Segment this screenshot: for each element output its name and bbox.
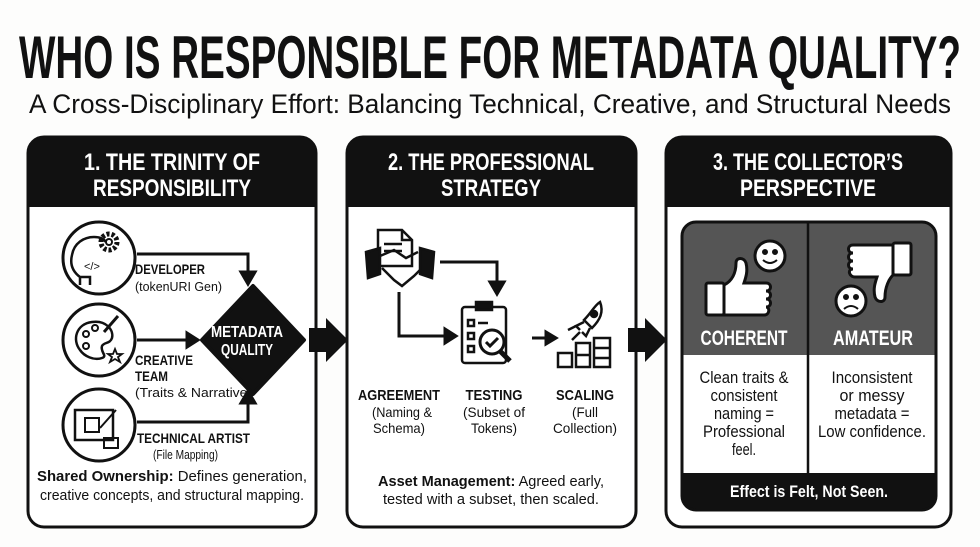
panel header 3: PERSPECTIVE bbox=[740, 175, 876, 202]
step labels bbox=[358, 387, 617, 436]
panel header 2: STRATEGY bbox=[441, 175, 541, 202]
icon: handshake with document bbox=[366, 230, 434, 286]
panel: professional strategy bbox=[347, 137, 636, 527]
panel header 2: 2. THE PROFESSIONAL bbox=[388, 149, 594, 176]
comparison box bbox=[681, 222, 937, 510]
icon: creative palette bbox=[63, 304, 135, 376]
panel header 2 bbox=[347, 137, 636, 207]
coherent description: consistent bbox=[710, 386, 778, 405]
shared ownership text: creative concepts, and structural mapping. bbox=[40, 487, 304, 504]
arrow: panel 1 to 2 bbox=[309, 318, 348, 362]
metadata quality diamond: METADATA bbox=[211, 324, 283, 341]
icon: thumbs down with frown bbox=[836, 243, 911, 316]
arrow: technical artist to quality bbox=[137, 391, 255, 422]
amateur description bbox=[818, 368, 926, 441]
technical artist label: TECHNICAL ARTIST bbox=[137, 430, 250, 446]
arrow: testing to scaling bbox=[532, 332, 556, 344]
amateur description: Inconsistent bbox=[832, 368, 913, 387]
amateur description: Low confidence. bbox=[818, 422, 926, 441]
icon: thumbs up with smile bbox=[706, 241, 785, 315]
icon: rocket scaling bbox=[558, 302, 610, 367]
amateur description: metadata = bbox=[834, 404, 910, 423]
comparison box: AMATEUR bbox=[833, 327, 913, 350]
panel header 1 bbox=[28, 137, 316, 207]
coherent description bbox=[700, 368, 789, 459]
step labels: Tokens) bbox=[471, 420, 517, 436]
creative label: TEAM bbox=[135, 368, 168, 384]
asset management text: Asset Management: Agreed early, bbox=[378, 473, 604, 490]
step labels: TESTING bbox=[466, 387, 522, 404]
creative label: CREATIVE bbox=[135, 352, 193, 368]
step labels: (Full bbox=[572, 404, 598, 420]
comparison box: COHERENT bbox=[700, 327, 788, 350]
step labels: Schema) bbox=[373, 420, 425, 436]
asset management text bbox=[378, 473, 604, 508]
panel: collector's perspective bbox=[666, 137, 951, 527]
icon: technical artist blueprint bbox=[63, 389, 135, 461]
developer label bbox=[135, 261, 222, 294]
technical artist label: (File Mapping) bbox=[153, 447, 218, 462]
amateur description: or messy bbox=[840, 386, 905, 405]
step labels: SCALING bbox=[556, 387, 614, 404]
panel header 3: 3. THE COLLECTOR’S bbox=[713, 149, 903, 176]
creative label: (Traits & Narrative) bbox=[135, 385, 252, 400]
creative label bbox=[135, 352, 252, 400]
panel: trinity of responsibility bbox=[28, 137, 316, 527]
shared ownership text bbox=[37, 468, 307, 504]
metadata quality diamond: QUALITY bbox=[221, 342, 273, 359]
arrow: developer to quality bbox=[137, 254, 255, 284]
shared ownership text: Shared Ownership: Defines generation, bbox=[37, 468, 307, 485]
arrow: panel 2 to 3 bbox=[628, 318, 667, 362]
developer label: (tokenURI Gen) bbox=[135, 279, 222, 294]
step labels: (Naming & bbox=[372, 404, 433, 420]
developer label: DEVELOPER bbox=[135, 261, 205, 277]
icon: developer head with gear: </> bbox=[84, 261, 100, 273]
technical artist label bbox=[137, 430, 250, 462]
arrows: agreement to testing bbox=[399, 262, 504, 343]
subtitle: A Cross-Disciplinary Effort: Balancing Technical, Creative, and Structural Needs bbox=[29, 89, 951, 119]
arrow: creative to quality bbox=[137, 333, 198, 347]
panel header 3 bbox=[666, 137, 951, 207]
coherent description: naming = bbox=[714, 404, 774, 423]
step labels: AGREEMENT bbox=[358, 387, 440, 404]
step labels: Collection) bbox=[553, 420, 617, 436]
icon: developer head with gear bbox=[63, 222, 135, 294]
panel header 1: 1. THE TRINITY OF bbox=[84, 149, 260, 176]
effect footer: Effect is Felt, Not Seen. bbox=[730, 482, 888, 501]
step labels: (Subset of bbox=[463, 404, 525, 420]
icon: testing clipboard bbox=[462, 302, 510, 363]
panel header 1: RESPONSIBILITY bbox=[93, 175, 251, 202]
coherent description: Clean traits & bbox=[700, 368, 789, 387]
metadata quality diamond bbox=[202, 286, 304, 394]
coherent description: Professional bbox=[703, 422, 785, 441]
coherent description: feel. bbox=[732, 440, 756, 459]
asset management text: tested with a subset, then scaled. bbox=[383, 491, 599, 508]
